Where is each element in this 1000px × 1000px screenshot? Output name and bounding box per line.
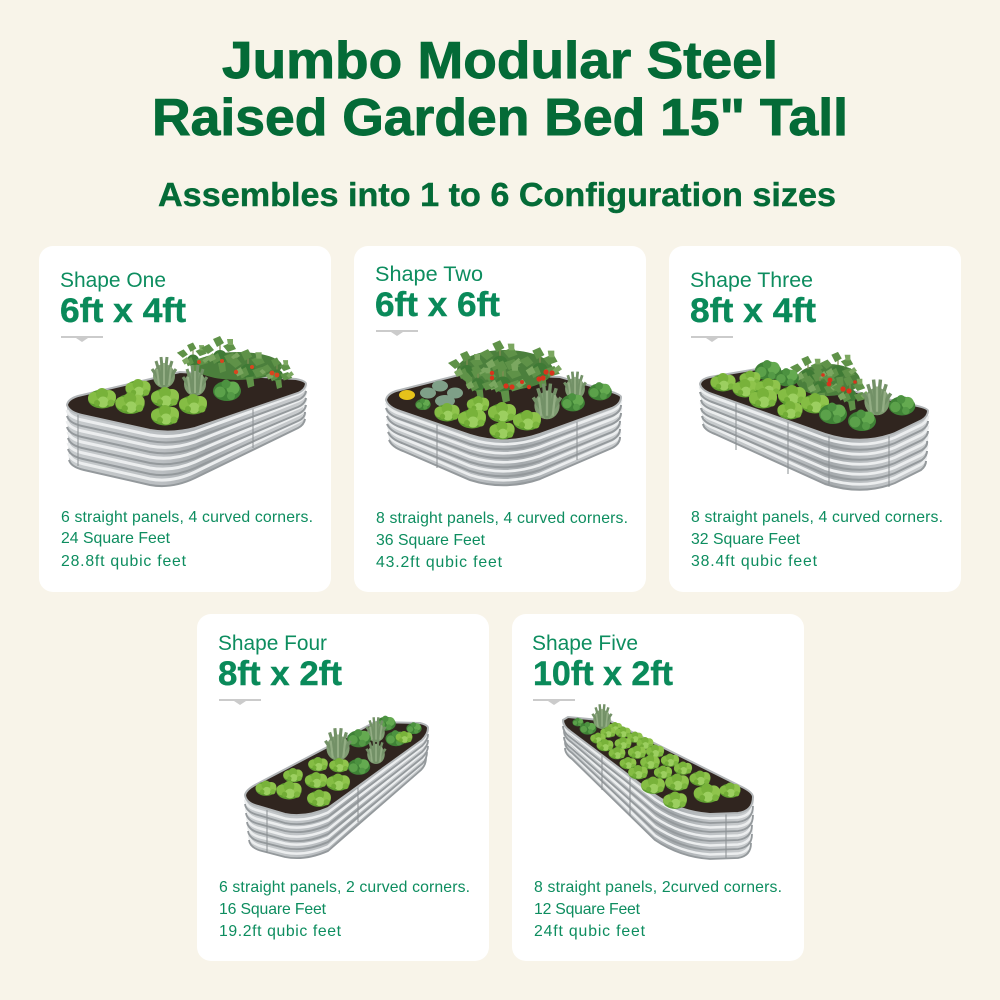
bed specifications: 38.4ft qubic feet — [691, 553, 818, 570]
bed specifications: 32 Square Feet — [691, 531, 801, 548]
panel: shape four — [197, 614, 489, 961]
subtitle: Assembles into 1 to 6 Configuration sizes — [158, 176, 836, 213]
shape name: Shape Five — [532, 632, 638, 655]
panel: shape two — [354, 246, 646, 592]
bed specifications — [61, 509, 313, 570]
divider marker — [219, 699, 261, 705]
bed specifications: 24 Square Feet — [61, 530, 171, 547]
bed specifications: 8 straight panels, 4 curved corners. — [376, 510, 628, 527]
bed specifications — [534, 879, 782, 940]
garden bed illustration — [67, 336, 306, 486]
panel: shape one — [39, 246, 331, 592]
divider marker — [376, 330, 418, 336]
bed specifications — [376, 510, 628, 571]
bed specifications: 43.2ft qubic feet — [376, 554, 503, 571]
title — [152, 32, 848, 147]
divider marker — [61, 336, 103, 342]
bed specifications: 19.2ft qubic feet — [219, 923, 342, 940]
shape name: Shape Three — [690, 269, 813, 292]
garden bed illustration — [245, 716, 428, 858]
bed specifications: 16 Square Feet — [219, 901, 327, 918]
bed specifications — [219, 879, 470, 940]
bed specifications — [691, 509, 943, 570]
bed specifications: 28.8ft qubic feet — [61, 553, 187, 570]
garden bed illustration — [563, 704, 753, 859]
shape name: Shape Four — [218, 632, 327, 655]
bed specifications: 8 straight panels, 4 curved corners. — [691, 509, 943, 526]
title: Raised Garden Bed 15" Tall — [152, 89, 848, 147]
garden bed illustration — [386, 340, 621, 485]
dimensions: 8ft x 2ft — [218, 655, 342, 693]
bed specifications: 12 Square Feet — [534, 901, 641, 918]
divider marker — [533, 699, 575, 705]
title: Jumbo Modular Steel — [222, 32, 778, 90]
shape name: Shape Two — [375, 263, 483, 286]
panel: shape five — [512, 614, 804, 961]
bed specifications: 6 straight panels, 2 curved corners. — [219, 879, 470, 896]
bed specifications: 6 straight panels, 4 curved corners. — [61, 509, 313, 526]
panel: shape three — [669, 246, 961, 592]
dimensions: 10ft x 2ft — [533, 655, 673, 693]
garden bed illustration — [700, 352, 928, 490]
bed specifications: 24ft qubic feet — [534, 923, 646, 940]
shape name: Shape One — [60, 269, 166, 292]
dimensions: 6ft x 4ft — [60, 292, 186, 330]
divider marker — [691, 336, 733, 342]
bed specifications: 8 straight panels, 2curved corners. — [534, 879, 782, 896]
dimensions: 6ft x 6ft — [375, 286, 500, 324]
dimensions: 8ft x 4ft — [690, 292, 816, 330]
bed specifications: 36 Square Feet — [376, 532, 486, 549]
